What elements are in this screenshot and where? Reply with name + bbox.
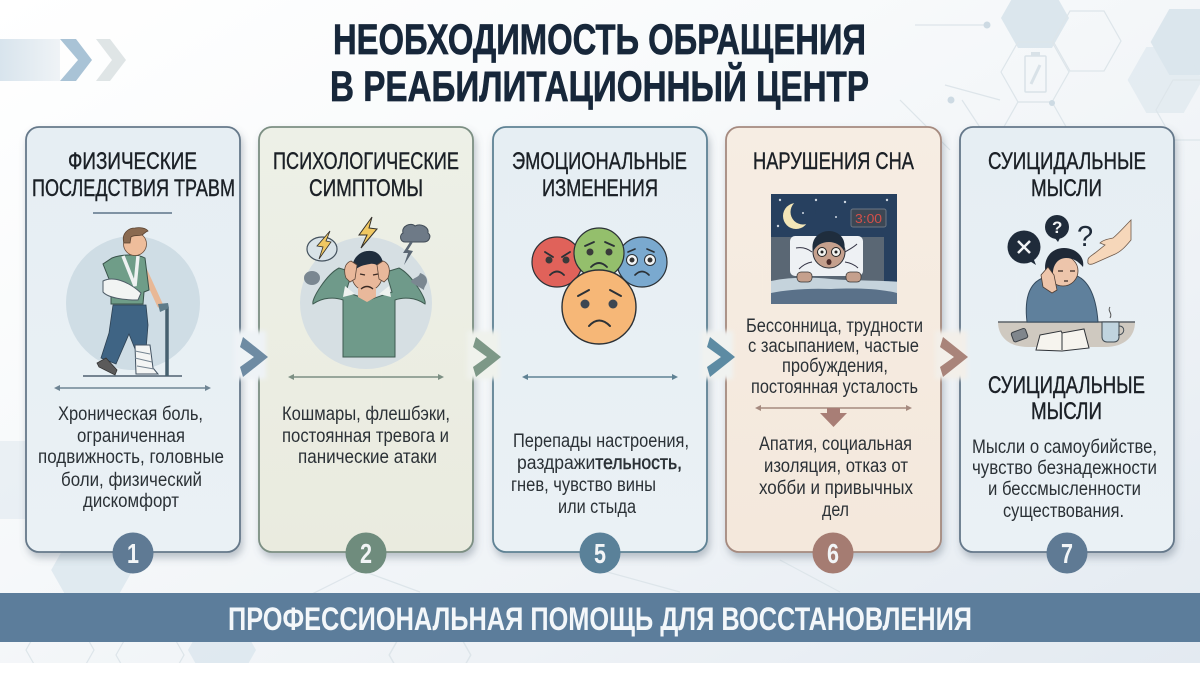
- panel: sleep disorders: [726, 127, 941, 552]
- text: suicidal description: и бессмысленности: [988, 479, 1141, 500]
- badge: 2: 2: [360, 538, 372, 569]
- text: psychological description: Кошмары, флешбэки,: [282, 404, 450, 425]
- panel: emotional changes: [493, 127, 707, 552]
- arrow: card 1 to 2: [234, 331, 268, 379]
- arrow: card 3 to 4: [701, 331, 735, 379]
- heading: suicidal repeated: [988, 372, 1145, 425]
- heading: emotional: [512, 148, 687, 202]
- icon: sleepless man in bed: [771, 194, 897, 304]
- icon: stressed man with storm thoughts: [300, 217, 432, 369]
- arrow: card 2 to 3: [467, 331, 501, 379]
- text: psychological description: постоянная тревога и: [282, 426, 449, 447]
- text: sleep description: с засыпанием, частые: [748, 336, 919, 357]
- text: physical description: подвижность, головные: [38, 447, 224, 468]
- badge: 6: 6: [827, 538, 839, 569]
- text: apathy description: [759, 434, 913, 521]
- text: emotional description: Перепады настроения,: [513, 431, 689, 452]
- text: suicidal description: существования.: [1003, 501, 1124, 522]
- badge: 5: [580, 532, 620, 574]
- heading: emotional: ЭМОЦИОНАЛЬНЫЕ: [512, 148, 687, 175]
- title: [330, 16, 869, 111]
- heading: suicidal repeated: МЫСЛИ: [1031, 398, 1102, 425]
- text: sleep description: [746, 316, 923, 398]
- text: emotional description: [511, 431, 689, 518]
- text: emotional description: гнев, чувство вины: [511, 475, 656, 496]
- text: apathy description: хобби и привычных: [759, 478, 913, 499]
- decorative header chevrons: [0, 39, 126, 81]
- badge: 6: [812, 532, 854, 574]
- badge: 1: 1: [127, 538, 139, 569]
- heading: suicidal: [988, 148, 1146, 202]
- bottom banner: [0, 593, 1200, 642]
- heading: physical: [32, 148, 235, 202]
- arrow: down: [820, 408, 847, 427]
- text: sleep description: Бессонница, трудности: [746, 316, 923, 337]
- text: physical description: ограниченная: [77, 426, 185, 447]
- heading: suicidal: СУИЦИДАЛЬНЫЕ: [988, 148, 1146, 175]
- icon: depressed man at desk: ?: [1077, 221, 1093, 253]
- text: suicidal description: [972, 437, 1157, 522]
- heading: psychological: ПСИХОЛОГИЧЕСКИЕ: [273, 148, 459, 175]
- badge: 5: 5: [594, 538, 606, 569]
- heading: psychological: [273, 148, 459, 202]
- badge: 7: 7: [1061, 538, 1073, 569]
- text: physical description: дискомфорт: [83, 491, 179, 512]
- text: apathy description: Апатия, социальная: [759, 434, 912, 455]
- text: emotional description: или стыда: [558, 497, 636, 518]
- text: sleep description: постоянная усталость: [751, 377, 918, 398]
- icon: emotion faces: [532, 228, 667, 344]
- text: apathy description: дел: [822, 500, 849, 521]
- heading: suicidal: МЫСЛИ: [1031, 175, 1102, 202]
- text: sleep description: пробуждения,: [782, 356, 888, 377]
- icon: sleepless man in bed: 3:00: [855, 211, 882, 226]
- badge: 7: [1046, 532, 1088, 574]
- heading: emotional: ИЗМЕНЕНИЯ: [542, 175, 658, 202]
- badge: 2: [346, 532, 386, 574]
- text: psychological description: панические атаки: [298, 447, 437, 468]
- arrow: card 4 to 5: [935, 331, 968, 379]
- icon: depressed man at desk: ?: [1052, 218, 1062, 237]
- bottom banner: ПРОФЕССИОНАЛЬНАЯ ПОМОЩЬ ДЛЯ ВОССТАНОВЛЕНИЯ: [228, 601, 972, 637]
- panel: psychological symptoms: [259, 127, 473, 552]
- text: physical description: Хроническая боль,: [58, 404, 203, 425]
- panel: physical consequences of injuries: [26, 127, 240, 552]
- heading: sleep: НАРУШЕНИЯ СНА: [753, 148, 914, 175]
- icon: depressed man at desk: [998, 215, 1135, 351]
- heading: physical: ПОСЛЕДСТВИЯ ТРАВМ: [32, 175, 235, 202]
- heading: psychological: СИМПТОМЫ: [309, 175, 423, 202]
- text: emotional description: раздражительность,: [517, 453, 682, 474]
- title: В РЕАБИЛИТАЦИОННЫЙ ЦЕНТР: [330, 62, 869, 111]
- badge: 1: [112, 532, 154, 574]
- text: suicidal description: Мысли о самоубийстве,: [972, 437, 1157, 458]
- text: physical description: [38, 404, 224, 512]
- title: НЕОБХОДИМОСТЬ ОБРАЩЕНИЯ: [333, 16, 866, 64]
- text: physical description: боли, физический: [61, 470, 202, 491]
- heading: suicidal repeated: СУИЦИДАЛЬНЫЕ: [988, 372, 1145, 399]
- panel: suicidal thoughts: [960, 127, 1174, 552]
- text: suicidal description: чувство безнадежности: [972, 458, 1157, 479]
- icon: injured man with cane: [66, 228, 200, 376]
- text: psychological description: [282, 404, 450, 468]
- heading: physical: ФИЗИЧЕСКИЕ: [68, 148, 197, 175]
- text: apathy description: изоляция, отказ от: [764, 456, 908, 477]
